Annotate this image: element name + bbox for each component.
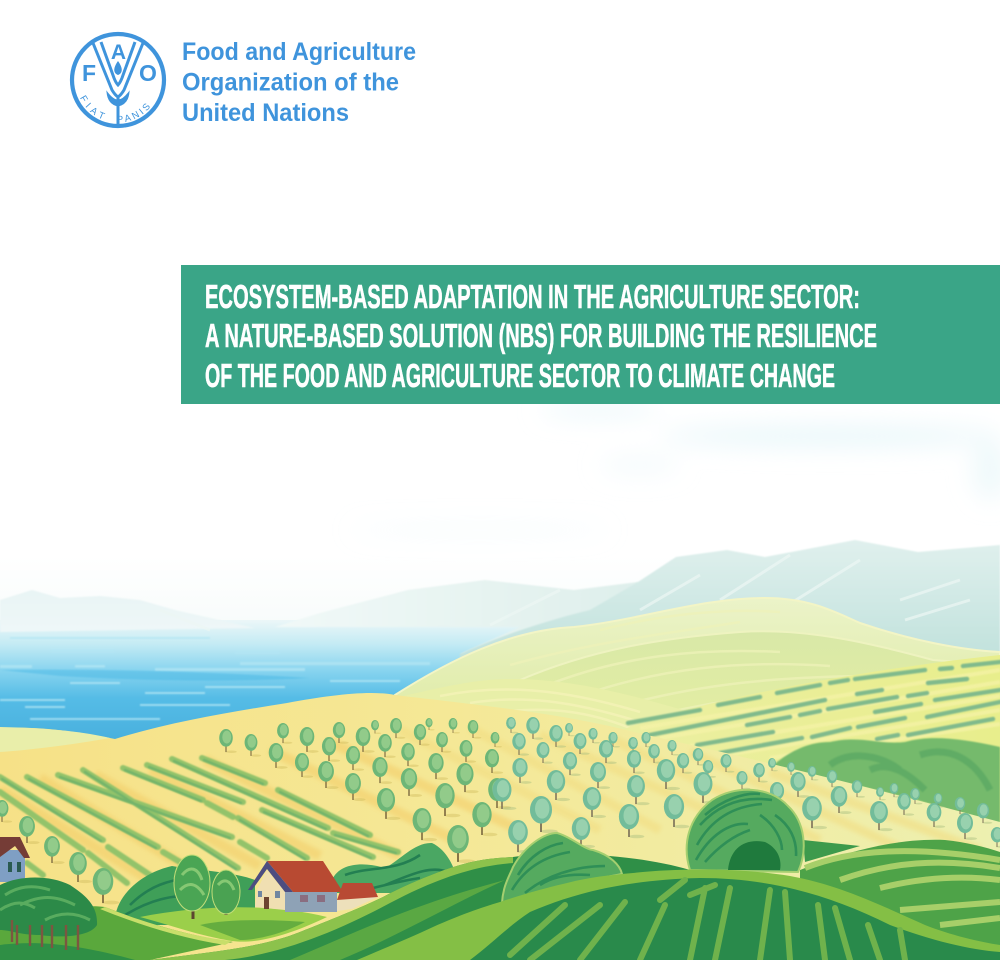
- FAO logo emblem: [70, 32, 166, 128]
- logo motto: PANIS: [120, 104, 150, 122]
- trees by house: [174, 855, 240, 919]
- big bush centre: [687, 790, 804, 872]
- sea: [0, 620, 520, 750]
- logo motto: [80, 95, 150, 122]
- right planted field: [620, 655, 1000, 850]
- main foreground hill: [357, 870, 1000, 960]
- orchard trees: [0, 717, 1000, 904]
- logo letters: A: [111, 41, 126, 64]
- far-left meadow: [0, 906, 327, 960]
- sky with clouds: [0, 404, 1000, 665]
- front-left hill: [150, 854, 700, 960]
- illustration: rural landscape: [0, 404, 1000, 960]
- orchard hillside: [0, 693, 1000, 960]
- bushes behind house: [115, 843, 457, 925]
- left house: [0, 837, 30, 882]
- logo letters: F: [82, 60, 96, 86]
- left tree group: [0, 878, 97, 950]
- bush left of centre: [502, 833, 622, 903]
- right forest: [770, 738, 1000, 825]
- wheat ear: [93, 42, 143, 126]
- title text: [205, 278, 877, 394]
- organization name: Food and Agriculture: [182, 38, 416, 66]
- logo letters: [82, 41, 157, 86]
- organization name: [182, 38, 416, 127]
- logo motto: FIAT: [80, 95, 106, 119]
- logo letters: O: [139, 60, 157, 86]
- mountains: [0, 540, 1000, 680]
- right striped hill: [800, 840, 1000, 960]
- title banner: [181, 265, 1000, 404]
- house: [248, 861, 378, 912]
- distant hills: [395, 598, 1000, 760]
- organization name: Organization of the: [182, 68, 399, 96]
- organization name: United Nations: [182, 99, 349, 127]
